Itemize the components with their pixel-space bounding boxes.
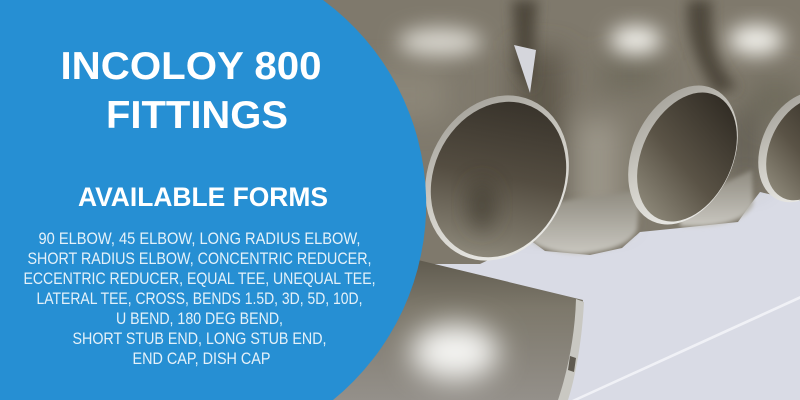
list of available forms: ECCENTRIC REDUCER, EQUAL TEE, UNEQUAL TEE, xyxy=(24,270,376,288)
title: FITTINGS xyxy=(106,94,288,137)
heading: available forms: AVAILABLE FORMS xyxy=(78,182,328,212)
list of available forms: 90 ELBOW, 45 ELBOW, LONG RADIUS ELBOW, xyxy=(38,230,360,248)
floor crease xyxy=(572,296,800,400)
list of available forms: SHORT RADIUS ELBOW, CONCENTRIC REDUCER, xyxy=(28,250,372,268)
title xyxy=(60,45,322,137)
foreground pipe xyxy=(330,258,584,400)
list of available forms: SHORT STUB END, LONG STUB END, xyxy=(72,330,326,348)
title: INCOLOY 800 xyxy=(60,45,322,88)
list of available forms: U BEND, 180 DEG BEND, xyxy=(116,310,283,328)
sliver of floor between elbows xyxy=(514,45,536,93)
photo: stainless steel pipe fittings xyxy=(300,0,800,400)
blue circle panel xyxy=(0,0,426,400)
elbow opening 3 xyxy=(758,94,800,202)
elbow opening 2 xyxy=(628,86,738,224)
list of available forms: LATERAL TEE, CROSS, BENDS 1.5D, 3D, 5D, 10D, xyxy=(36,290,362,308)
list of available forms: END CAP, DISH CAP xyxy=(132,350,270,368)
elbow opening 1 xyxy=(426,95,569,261)
list of available forms xyxy=(24,230,376,368)
elbow bases on the floor xyxy=(531,170,753,254)
